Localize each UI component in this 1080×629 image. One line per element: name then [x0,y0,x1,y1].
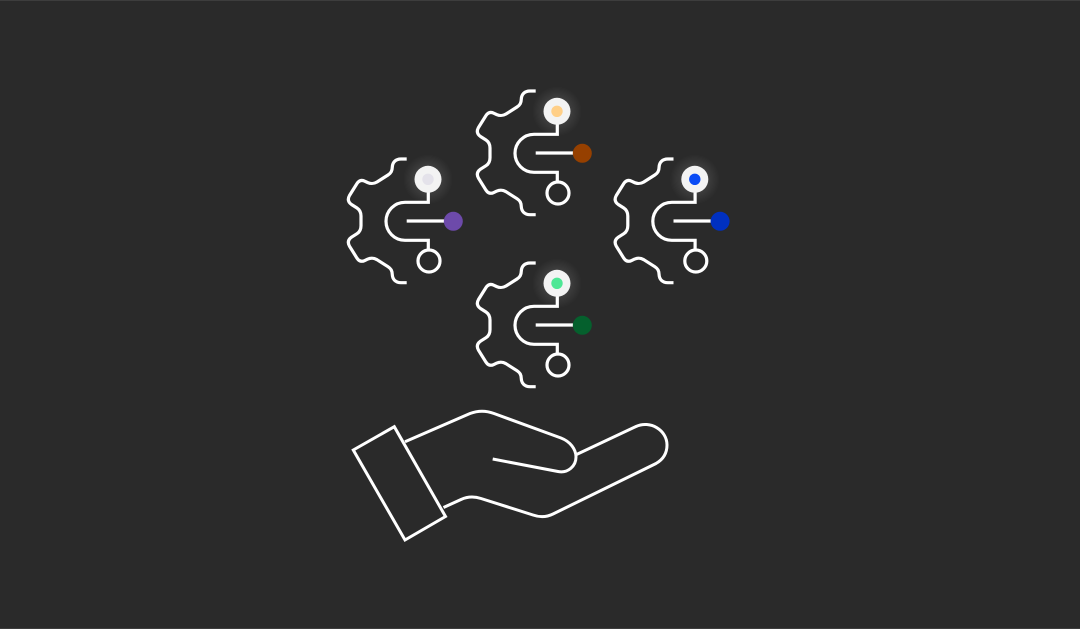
gear: top, orange [477,86,592,215]
gear: right, blue [615,154,730,283]
icon: open hand [353,411,667,540]
gear: bottom, green [477,258,592,387]
hand cuff [353,427,446,540]
gear: left, purple [348,154,463,283]
thumb and upper hand [405,411,576,472]
finger and lower hand [444,424,667,517]
